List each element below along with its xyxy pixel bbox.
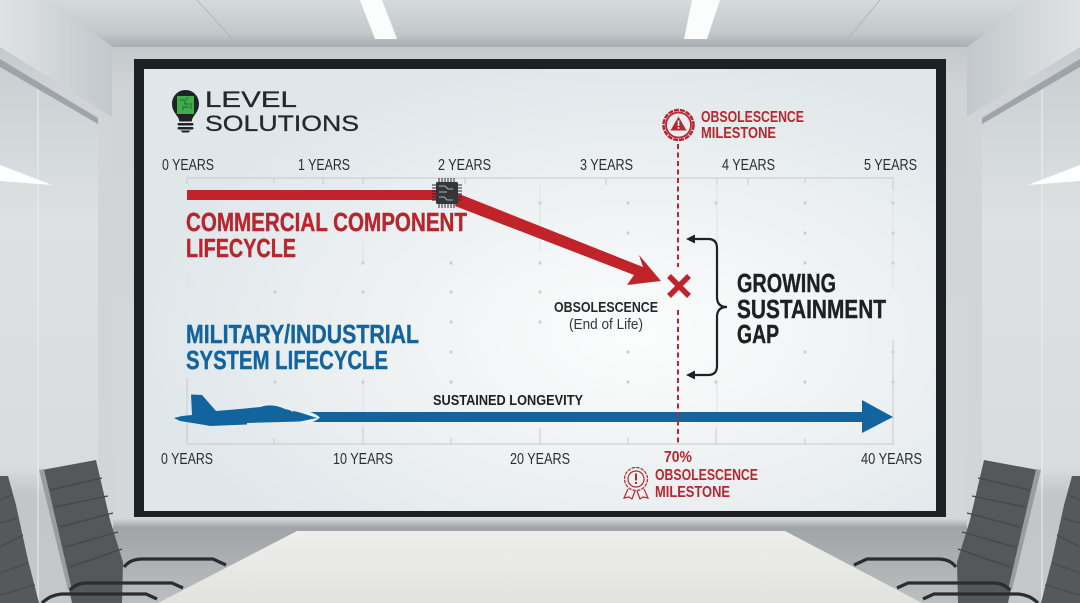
icon: milestone ribbon award xyxy=(624,468,648,499)
icon: fighter jet xyxy=(174,394,320,426)
bottom axis labels: decades: 40 YEARS xyxy=(861,451,922,468)
bottom milestone label: MILESTONE xyxy=(655,484,730,501)
commercial component heading xyxy=(186,207,467,263)
chart grid xyxy=(187,178,895,444)
top axis labels: years xyxy=(162,157,917,174)
sustained longevity label: SUSTAINED LONGEVITY xyxy=(433,393,583,409)
icon: obsolescence warning badge xyxy=(664,110,694,140)
military industrial heading: SYSTEM LIFECYCLE xyxy=(186,345,388,375)
bottom axis labels: decades: 20 YEARS xyxy=(510,451,570,468)
top axis labels: years: 1 YEARS xyxy=(298,157,350,174)
top axis labels: years: 5 YEARS xyxy=(864,157,917,174)
top axis labels: years: 3 YEARS xyxy=(580,157,633,174)
bottom axis labels: decades xyxy=(161,451,922,468)
chairs left xyxy=(0,460,226,603)
top milestone label: MILESTONE xyxy=(701,125,776,142)
gap bracket with arrows xyxy=(686,234,727,380)
growing sustainment gap label xyxy=(737,268,886,349)
red commercial lifecycle line and arrow xyxy=(187,190,661,285)
70 percent marker: 70% xyxy=(664,449,692,466)
top axis labels: years: 2 YEARS xyxy=(438,157,491,174)
commercial component heading: COMMERCIAL COMPONENT xyxy=(186,207,467,237)
military industrial heading: MILITARY/INDUSTRIAL xyxy=(186,319,419,349)
logo wordmark: SOLUTIONS xyxy=(205,111,359,136)
top axis labels: years: 0 YEARS xyxy=(162,157,214,174)
logo wordmark xyxy=(205,87,359,136)
blue military lifecycle arrow xyxy=(308,400,893,433)
top milestone label xyxy=(701,109,804,142)
commercial component heading: LIFECYCLE xyxy=(186,233,296,263)
growing sustainment gap label: SUSTAINMENT xyxy=(737,294,886,324)
display frame xyxy=(134,59,946,517)
icon: microchip xyxy=(432,178,462,208)
obsolescence end of life label xyxy=(554,299,658,333)
ceiling light right xyxy=(684,0,720,39)
icon: light bulb with circuit xyxy=(172,90,199,132)
logo wordmark: LEVEL xyxy=(205,87,297,112)
display screen xyxy=(144,69,936,511)
bottom axis labels: decades: 10 YEARS xyxy=(333,451,393,468)
bottom milestone label: OBSOLESCENCE xyxy=(655,467,758,484)
top milestone label: OBSOLESCENCE xyxy=(701,109,804,126)
bottom milestone label xyxy=(655,467,758,501)
dashed obsolescence milestone line xyxy=(677,144,679,444)
obsolescence end of life label: (End of Life) xyxy=(569,316,643,333)
military industrial heading xyxy=(186,319,419,375)
growing sustainment gap label: GAP xyxy=(737,319,779,349)
ceiling light left xyxy=(360,0,397,39)
growing sustainment gap label: GROWING xyxy=(737,268,836,298)
bottom axis labels: decades: 0 YEARS xyxy=(161,451,213,468)
conference table xyxy=(158,531,922,603)
red X: end of life marker xyxy=(669,276,689,296)
logo: Level Solutions xyxy=(172,87,359,136)
top axis labels: years: 4 YEARS xyxy=(722,157,775,174)
obsolescence end of life label: OBSOLESCENCE xyxy=(554,299,658,316)
chairs right xyxy=(854,460,1080,603)
